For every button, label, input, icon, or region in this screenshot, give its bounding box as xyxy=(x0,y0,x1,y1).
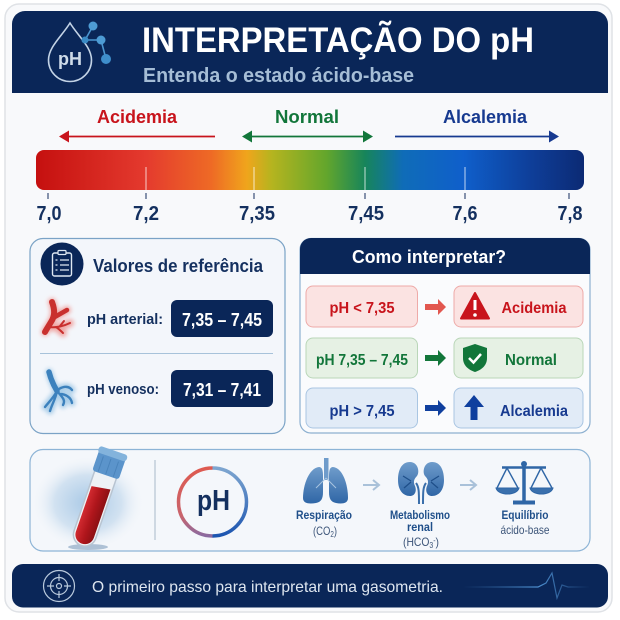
row: normal: pH 7,35 – 7,45 xyxy=(316,352,408,369)
icon: pH drop with molecule: pH xyxy=(58,49,82,69)
scale ticks and numbers: 7,35 xyxy=(239,203,275,225)
value: arterial range xyxy=(171,300,273,337)
icon: clipboard xyxy=(40,242,84,286)
scale ticks and numbers: 7,6 xyxy=(452,203,478,225)
panel header xyxy=(300,238,590,274)
label: Acidemia: Acidemia xyxy=(97,107,178,127)
caption: respiration: (CO xyxy=(313,524,335,538)
caption: renal metabolism: renal xyxy=(407,520,433,534)
panel: physiology strip xyxy=(30,446,590,551)
caption: balance xyxy=(500,508,550,537)
row: normal: Normal xyxy=(505,352,557,369)
caption: respiration: Respiração xyxy=(296,508,352,522)
panel: how to interpret xyxy=(300,238,590,433)
pH gradient bar xyxy=(36,150,584,190)
icon: blood tube xyxy=(32,446,144,550)
scale ticks and numbers xyxy=(36,193,582,225)
icon: vein xyxy=(45,372,72,411)
scale ticks and numbers: 7,8 xyxy=(558,203,582,225)
caption: renal metabolism: 3 xyxy=(429,541,434,550)
caption: respiration xyxy=(296,508,352,539)
icon: pH ring: pH xyxy=(197,485,230,517)
row: alcalemia xyxy=(306,388,583,428)
scale ticks and numbers: 7,2 xyxy=(133,203,159,225)
value: venous range xyxy=(171,370,273,407)
scale ticks and numbers: 7,45 xyxy=(348,203,384,225)
footer text: O primeiro passo para interpretar uma gasometria. xyxy=(92,579,443,596)
title: INTERPRETAÇÃO DO pH xyxy=(142,21,534,60)
arrow xyxy=(460,480,476,490)
value: venous range: 7,31 – 7,41 xyxy=(183,380,261,400)
caption: balance: Equilíbrio xyxy=(502,508,548,522)
caption: respiration: ) xyxy=(334,524,337,538)
row: acidemia xyxy=(306,286,583,327)
heading: Valores de referência xyxy=(93,256,264,276)
subtitle: Entenda o estado ácido-base xyxy=(143,65,414,87)
icon: balance scale xyxy=(496,462,553,502)
label: pH venoso: pH venoso: xyxy=(87,381,159,398)
row: acidemia: Acidemia xyxy=(502,300,567,317)
caption: renal metabolism: Metabolismo xyxy=(390,508,450,522)
caption: balance: ácido-base xyxy=(500,523,550,537)
caption: renal metabolism xyxy=(390,508,450,550)
header banner xyxy=(12,11,608,93)
icon: pH drop with molecule xyxy=(48,22,111,82)
value: arterial range: 7,35 – 7,45 xyxy=(182,310,262,330)
row: normal xyxy=(306,338,583,378)
caption: renal metabolism: (HCO xyxy=(403,535,434,549)
label: Normal: Normal xyxy=(275,107,339,127)
label: Alcalemia: Alcalemia xyxy=(443,107,528,127)
arrow xyxy=(363,480,379,490)
label: Alcalemia xyxy=(395,107,559,142)
icon: target xyxy=(44,570,74,602)
caption: renal metabolism: ) xyxy=(436,535,439,549)
label: Acidemia xyxy=(59,107,215,142)
icon: artery xyxy=(45,302,70,333)
icon: pH ring xyxy=(178,468,246,536)
icon: heartbeat line xyxy=(463,573,590,598)
scale section xyxy=(36,107,584,225)
caption: respiration: 2 xyxy=(330,530,334,539)
row: alcalemia: Alcalemia xyxy=(500,403,568,420)
caption: renal metabolism: - xyxy=(433,536,436,545)
panel header: Como interpretar? xyxy=(352,247,506,267)
icon: kidneys xyxy=(398,462,444,504)
label: pH arterial: pH arterial: xyxy=(87,311,163,328)
footer banner xyxy=(12,564,608,608)
label: Normal xyxy=(242,107,373,142)
row: alcalemia: pH > 7,45 xyxy=(330,403,395,420)
row: acidemia: pH < 7,35 xyxy=(330,300,395,317)
icon: lungs xyxy=(303,458,348,503)
panel: reference values xyxy=(30,238,285,434)
scale ticks and numbers: 7,0 xyxy=(36,203,62,225)
